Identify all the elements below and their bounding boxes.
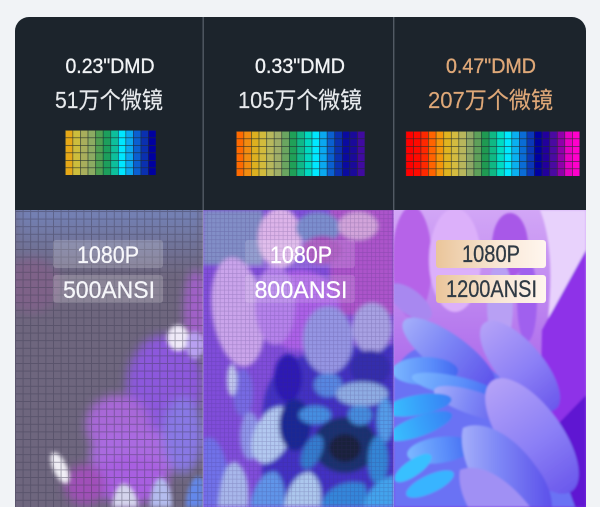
badges: column 3: 1200ANSI (446, 276, 537, 303)
photo: 0.47 inch sharp flower (394, 210, 586, 507)
column 2 heading (238, 55, 362, 113)
column 3 heading: 207万个微镜 (428, 87, 553, 113)
badges: column 2: 800ANSI (254, 277, 348, 304)
badges: column 2 (245, 240, 355, 304)
swatch: 12-column colour grid (65, 130, 156, 175)
badges: column 1 (53, 240, 163, 304)
column 1 heading: 51万个微镜 (55, 87, 163, 113)
dark header panel (15, 17, 586, 210)
swatch: 23-column colour grid (406, 131, 580, 176)
swatch: 17-column colour grid (236, 131, 365, 176)
column 1 heading (55, 55, 163, 113)
column divider lines (202, 17, 394, 507)
pixel grid overlay (15, 210, 203, 507)
column 3 heading: 0.47"DMD (446, 55, 536, 78)
photo: 0.23 inch dim blurry flower (4, 205, 208, 507)
photo: 0.33 inch mid-brightness flower (203, 205, 394, 507)
micro-mirror grid overlay (203, 210, 394, 507)
column 3 heading (428, 55, 553, 113)
badges: column 3: 1080P (462, 241, 520, 268)
badges: column 1: 1080P (77, 242, 139, 269)
column 1 heading: 0.23"DMD (66, 55, 154, 78)
column 2 heading: 105万个微镜 (238, 87, 362, 113)
column 2 heading: 0.33"DMD (255, 55, 345, 78)
badges: column 2: 1080P (270, 242, 332, 269)
badges: column 1: 500ANSI (63, 277, 155, 304)
badges: column 3 (436, 240, 546, 303)
